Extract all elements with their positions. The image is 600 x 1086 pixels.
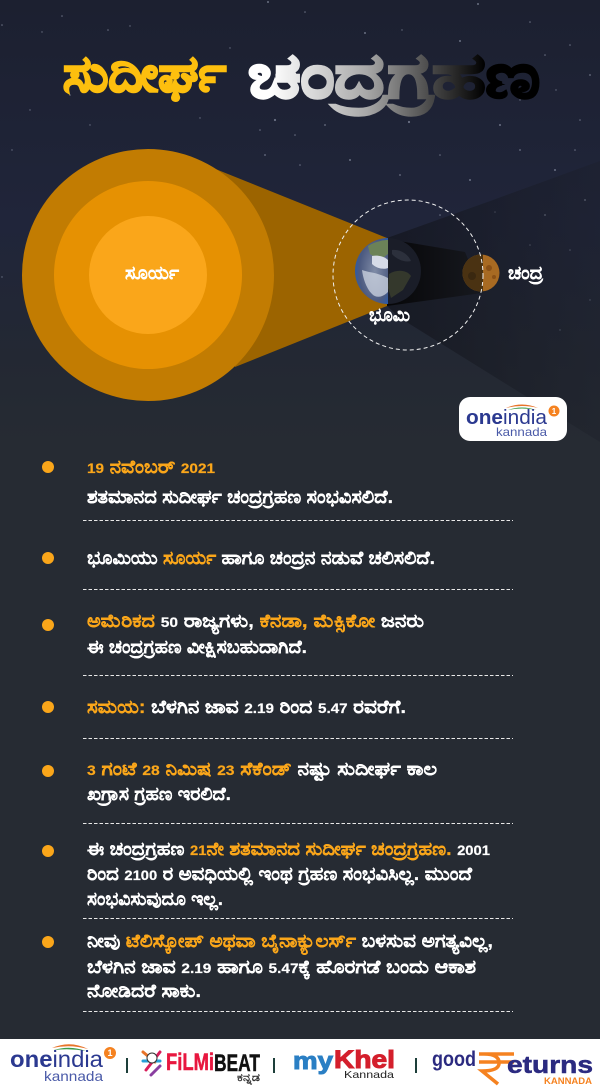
fact 7: ನೋಡಿದರೆ ಸಾಕು. [87, 981, 201, 1001]
sunlight beam [213, 168, 387, 367]
logo: oneindia kannada: oneindia [10, 1046, 103, 1072]
fact 1 [42, 457, 393, 509]
logo: oneindia kannada: kannada [44, 1068, 103, 1084]
fact 6: ಸಂಭವಿಸುವುದೂ ಇಲ್ಲ. [87, 889, 223, 911]
logo: mykhel: my [293, 1048, 334, 1075]
fact 1: ಶತಮಾನದ ಸುದೀರ್ಘ ಚಂದ್ರಗ್ರಹಣ ಸಂಭವಿಸಲಿದೆ. [87, 487, 393, 509]
logo badge: oneindia kannada [459, 397, 567, 441]
logo: filmibeat: FiLMi [166, 1049, 214, 1076]
separator [273, 1058, 275, 1073]
logo badge: oneindia kannada: kannada [496, 425, 547, 439]
penumbra shadow [387, 161, 600, 442]
logo: filmibeat: ಕನ್ನಡ [237, 1072, 260, 1085]
fact 6: ರಿಂದ 2100 ರ ಅವಧಿಯಲ್ಲಿ ಇಂಥ ಗ್ರಹಣ ಸಂಭವಿಸಿಲ್ಲ. ಮುಂದೆ [87, 864, 473, 886]
footer logos [0, 1039, 600, 1086]
logo: oneindia kannada [10, 1044, 116, 1084]
moon label: ಚಂದ್ರ [508, 263, 544, 285]
fact 5: ಖಗ್ರಾಸ ಗ್ರಹಣ ಇರಲಿದೆ. [87, 784, 231, 807]
logo: filmibeat: BEAT [214, 1050, 260, 1077]
logo: mykhel: Khel [334, 1046, 395, 1074]
fact 4: ಸಮಯ: ಬೆಳಗಿನ ಜಾವ 2.19 ರಿಂದ 5.47 ರವರೆಗೆ. [87, 697, 406, 717]
fact 7 [42, 931, 493, 1001]
earth label: ಭೂಮಿ [369, 305, 410, 325]
logo badge: oneindia kannada: oneindia [466, 407, 548, 429]
logo: oneindia kannada: 1 [107, 1048, 113, 1058]
fact 3 [42, 611, 424, 659]
logo: mykhel: Kannada [344, 1069, 394, 1081]
title: ಸುದೀರ್ಘ [63, 46, 226, 102]
logo: goodreturns: KANNADA [544, 1076, 593, 1086]
moon [462, 254, 500, 292]
umbra shadow [387, 239, 482, 306]
fact 6: ಈ ಚಂದ್ರಗ್ರಹಣ 21ನೇ ಶತಮಾನದ ಸುದೀರ್ಘ ಚಂದ್ರಗ್ರಹಣ. 2001 [87, 839, 491, 861]
fact 5 [42, 759, 437, 807]
separator [415, 1058, 417, 1073]
logo: goodreturns: good [432, 1048, 476, 1071]
fact 1: 19 ನವೆಂಬರ್ 2021 [87, 457, 216, 477]
sun [22, 149, 274, 401]
logo: filmibeat [143, 1049, 260, 1085]
earth [355, 238, 421, 304]
logo badge: oneindia kannada: 1 [552, 407, 557, 416]
title [63, 42, 540, 116]
logo: goodreturns [432, 1048, 593, 1086]
fact 5: 3 ಗಂಟೆ 28 ನಿಮಿಷ 23 ಸೆಕೆಂಡ್ ನಷ್ಟು ಸುದೀರ್ಘ ಕಾಲ [87, 759, 437, 782]
fact 3: ಈ ಚಂದ್ರಗ್ರಹಣ ವೀಕ್ಷಿಸಬಹುದಾಗಿದೆ. [87, 637, 307, 659]
logo: mykhel [293, 1046, 395, 1081]
separator [126, 1058, 128, 1073]
fact 3: ಅಮೆರಿಕದ 50 ರಾಜ್ಯಗಳು, ಕೆನಡಾ, ಮೆಕ್ಸಿಕೋ ಜನರು [87, 611, 424, 635]
logo: goodreturns: eturns [507, 1052, 593, 1079]
fact 7: ಬೆಳಗಿನ ಜಾವ 2.19 ಹಾಗೂ 5.47ಕ್ಕೆ ಹೊರಗಡೆ ಬಂದು ಆಕಾಶ [87, 957, 476, 979]
fact 2: ಭೂಮಿಯು ಸೂರ್ಯ ಹಾಗೂ ಚಂದ್ರನ ನಡುವೆ ಚಲಿಸಲಿದೆ. [87, 548, 435, 570]
sun label: ಸೂರ್ಯ [125, 263, 180, 283]
title: ಚಂದ್ರಗ್ರಹಣ [248, 42, 540, 116]
fact 6 [42, 839, 491, 911]
star field [1, 1, 591, 331]
fact 7: ನೀವು ಟೆಲಿಸ್ಕೋಪ್ ಅಥವಾ ಬೈನಾಕ್ಯುಲರ್ಸ್ ಬಳಸುವ ಅಗತ್ಯವಿಲ್ಲ, [87, 931, 493, 955]
orbit ring [333, 200, 483, 350]
